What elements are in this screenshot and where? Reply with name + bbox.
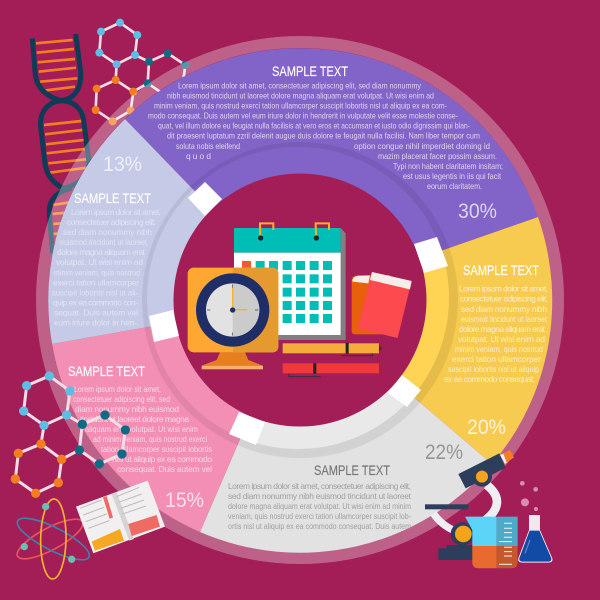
text block: purple segment: [148, 63, 503, 223]
heading: grey: SAMPLE TEXT: [314, 462, 390, 478]
body: yellow: suscipit lobortis nisl ut aliquip: [448, 364, 539, 374]
body: pink: diam nonummy nibh euismod: [75, 404, 179, 414]
white separators: [149, 182, 448, 445]
body: yellow: Lorem ipsum dolor sit amet,: [459, 284, 548, 294]
body: purple: dit praesent luptatum zzril delenit augue duis dolore te feugait nulla facilisi. Nam liber tempor cum: [167, 131, 480, 141]
icon: beaker: [465, 517, 518, 568]
body: yellow: euismod tincidunt ut laoreet: [461, 314, 548, 324]
icon: yellow pen: [283, 343, 382, 356]
body: grey: ortis nisl ut aliquip ex ea commodo consequat. Duis autem: [228, 521, 411, 531]
body: pink: consequat. Duis autem vel: [117, 464, 212, 474]
body: lavender: Lorem ipsum dolor sit amet,: [71, 207, 161, 217]
body: yellow: [444, 284, 548, 384]
body: pink: [73, 384, 212, 474]
body: purple: Lorem ipsum dolor sit amet, consectetuer adipiscing elit, sed diam nonummy: [178, 80, 422, 90]
percent: 15%: 15%: [165, 489, 204, 512]
body: yellow: minim veniam, quis nostrud: [455, 344, 543, 354]
segment: lavender 13%: [48, 119, 300, 344]
icon: DNA helix: [32, 34, 89, 253]
body: lavender: exerci tation ullamcorper: [53, 278, 139, 288]
icon: upper molecule: [92, 19, 189, 125]
body: lavender: eum iriure dolor in hen-: [54, 318, 137, 328]
percent: 13%: 13%: [103, 153, 142, 176]
lighter inner yellow zone: [396, 267, 449, 388]
body: yellow: sed diam nonummy nibh: [461, 304, 547, 314]
icon: lower molecule: [11, 371, 130, 498]
body: purple: [148, 80, 503, 191]
body: lavender: minim veniam, quis nostrud: [54, 268, 140, 278]
body: lavender: suscipit lobortis nisl ut ali-: [52, 288, 138, 298]
centre illustration: [188, 223, 412, 377]
body: yellow: exerci tation ullamcorper: [452, 354, 541, 364]
panel: donut chart segments: [48, 48, 552, 553]
body: lavender: consectetuer adipiscing elit,: [67, 217, 156, 227]
body: purple: mazim placerat facer possim assum.: [378, 151, 497, 161]
segment: yellow 20%: [300, 217, 552, 464]
body: pink: ad minim veniam, quis nostrud exerci: [93, 434, 207, 444]
icon: red pen: [283, 363, 379, 377]
body: yellow: dolore magna aliquam erat: [459, 324, 546, 334]
percent: 22%: 22%: [425, 441, 463, 464]
icon: calendar: [234, 223, 346, 340]
body: lavender: sequat. Duis autem vel: [54, 308, 138, 318]
body: purple: Typi non habent claritatem insitam;: [393, 161, 503, 171]
body: purple: option congue nihil imperdiet doming id: [354, 141, 490, 151]
icon: microscope: [425, 450, 514, 560]
body: pink: tation ullamcorper suscipit lobortis: [101, 444, 212, 454]
icon: atom: [12, 499, 94, 579]
body: lavender: sed diam nonummy nibh: [63, 227, 152, 237]
body: yellow: volutpat. Ut wisi enim ad: [458, 334, 545, 344]
body: purple: quod: [186, 151, 211, 161]
body: grey: [228, 481, 412, 531]
body: purple: quat, vel illum dolore eu feugiat nulla facilisis at vero eros et accumsan et iusto odio dignissim qui blan-: [158, 121, 470, 131]
body: grey: veniam, quis nostrud exerci tation ullamcorper suscipit lob-: [228, 511, 411, 521]
body: purple: nibh euismod tincidunt ut laoreet dolore magna aliquam erat volutpat. Ut wisi enim ad: [167, 90, 434, 100]
body: pink: Lorem ipsum dolor sit amet,: [74, 384, 161, 394]
heading: lavender: SAMPLE TEXT: [74, 190, 151, 206]
body: lavender: volutpat. Ut wisi enim ad: [56, 257, 143, 267]
icon: clock: [188, 268, 278, 369]
lighter inner grey zone: [396, 382, 397, 383]
segment: grey 22%: [200, 300, 492, 553]
body: pink: consectetuer adipiscing elit, sed: [73, 394, 170, 404]
body: pink: tincidunt ut laoreet dolore magna: [80, 414, 189, 424]
body: purple: soluta nobis eleifend: [176, 141, 240, 151]
body: grey: dolore magna aliquam erat volutpat. Ut wisi enim ad minim: [228, 501, 411, 511]
body: lavender: quip ex ea commodo con-: [53, 298, 138, 308]
heading: pink: SAMPLE TEXT: [68, 363, 145, 379]
segment: pink 15%: [52, 300, 300, 532]
body: purple: minim veniam, quis nostrud exerci tation ullamcorper suscipit lobortis nisl ut aliquip ex ea com-: [154, 100, 447, 110]
body: pink: nisl ut aliquip ex ea commodo: [112, 454, 212, 464]
icon: books: [352, 272, 412, 338]
icon: flask: [518, 481, 552, 563]
heading: yellow: SAMPLE TEXT: [463, 262, 539, 278]
text block: lavender segment: [52, 153, 161, 328]
body: yellow: consectetuer adipiscing elit,: [460, 294, 548, 304]
text block: grey segment: [228, 441, 463, 531]
outer translucent ring: [42, 42, 558, 558]
body: lavender: dolore magna aliquam erat: [57, 247, 146, 257]
centre hole: [174, 174, 426, 426]
segment: purple 30%: [125, 48, 538, 300]
percent: 30%: 30%: [458, 200, 497, 223]
body: grey: Lorem ipsum dolor sit amet, consectetuer adipiscing elit,: [228, 481, 411, 491]
icon: open book: [76, 481, 165, 553]
body: purple: est usus legentis in iis qui facit: [403, 171, 502, 181]
heading: purple: SAMPLE TEXT: [272, 63, 348, 79]
body: lavender: [52, 207, 161, 328]
body: lavender: euismod tincidunt ut laoreet: [60, 237, 148, 247]
percent: 20%: 20%: [467, 416, 506, 439]
body: yellow: ex ea commodo consequat.: [444, 374, 535, 384]
body: purple: modo consequat. Duis autem vel eum iriure dolor in hendrerit in vulputate velit esse molestie conse-: [148, 110, 458, 120]
text block: pink segment: [68, 363, 212, 512]
text block: yellow segment: [444, 262, 548, 439]
body: grey: sed diam nonummy nibh euismod tincidunt ut laoreet: [228, 491, 412, 501]
body: purple: eorum claritatem.: [427, 181, 482, 191]
body: pink: aliquam erat volutpat. Ut wisi enim: [85, 424, 198, 434]
